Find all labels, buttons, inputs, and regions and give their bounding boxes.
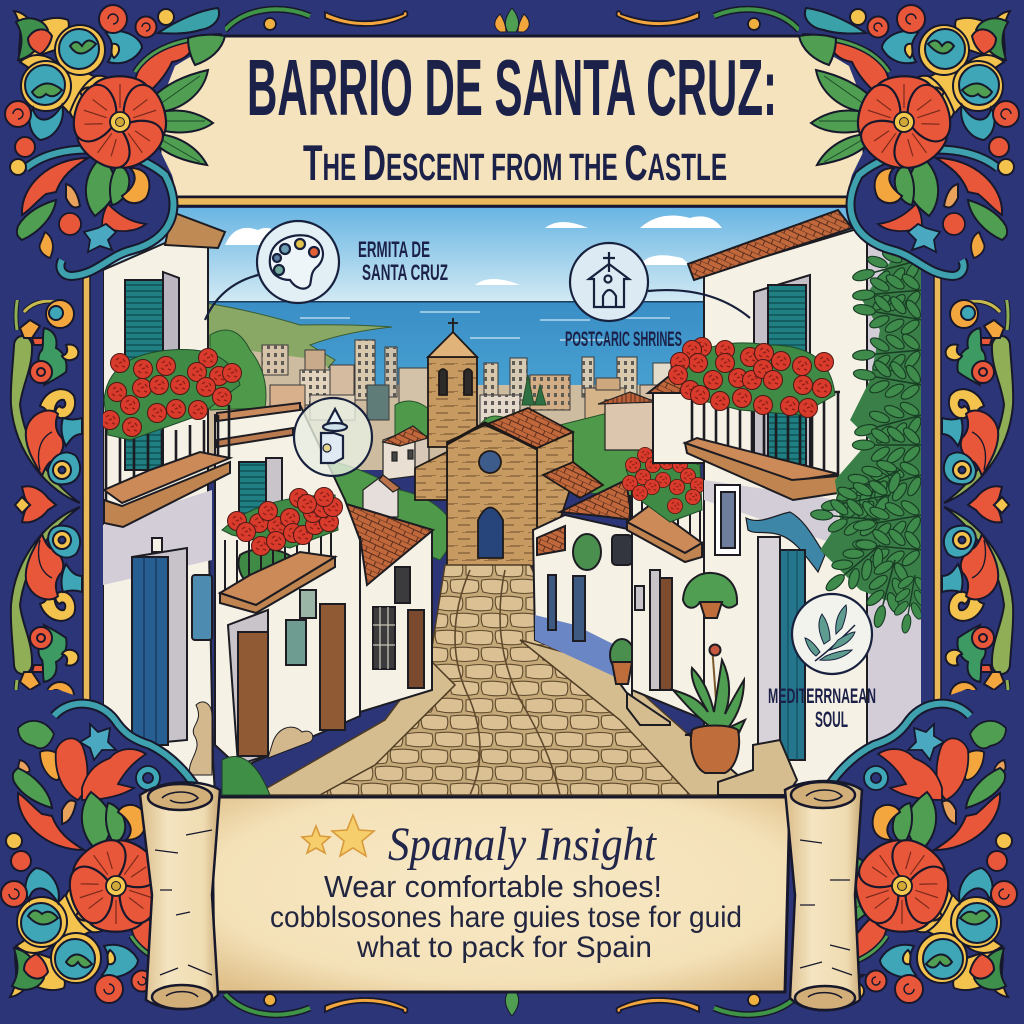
insight heading: Spanaly Insight (388, 818, 657, 871)
church with tower (415, 318, 603, 572)
insight body text: Wear comfortable shoes! (324, 869, 662, 904)
corner: top left floral (5, 5, 225, 240)
label: Ermita de Santa Cruz (358, 237, 448, 285)
right balcony (668, 338, 840, 500)
corner: top right floral (799, 5, 1019, 240)
coastal hill (205, 303, 392, 400)
side chapel roof (543, 462, 603, 498)
label: Postcaric Shrines: POSTCARIC SHRINES (565, 328, 682, 351)
climbing vine (809, 240, 932, 636)
central balcony (220, 488, 342, 613)
trees around the church (210, 330, 660, 560)
label: Mediterrnaean Soul: SOUL (815, 707, 848, 732)
street scene panel (100, 208, 932, 795)
corner: bottom right floral (797, 768, 1017, 1003)
left side border vines (11, 272, 82, 738)
upper left balcony (100, 348, 242, 527)
right side border vines (942, 272, 1013, 738)
house with red roof (333, 500, 433, 712)
insight scroll (140, 781, 862, 1010)
right foreground houses (533, 210, 932, 795)
inner gold frame rails (83, 260, 941, 740)
callout: olive sprig icon (792, 594, 872, 674)
bottom border ornament (225, 992, 799, 1016)
left foreground houses (100, 212, 433, 795)
hanging pot plant (683, 573, 737, 618)
right stone curb (520, 640, 780, 795)
small house behind right balcony (648, 377, 705, 463)
label: Ermita de Santa Cruz: SANTA CRUZ (362, 260, 448, 285)
insight body text (270, 869, 742, 964)
subtitle: THE DESCENT FROM THE CASTLE (303, 135, 727, 191)
left scroll roll (140, 782, 220, 1009)
parchment body (212, 797, 790, 992)
central white house (215, 403, 360, 768)
label: Ermita de Santa Cruz: ERMITA DE (358, 237, 430, 262)
label: Mediterrnaean Soul (768, 685, 876, 732)
callout: palette icon (205, 221, 339, 320)
sea (100, 302, 924, 412)
church facade and nave (415, 408, 573, 572)
cobblestone street (255, 565, 780, 795)
navy frame margins (91, 260, 933, 740)
foreground shrub bottom left (222, 757, 270, 795)
insight body text: what to pack for Spain (356, 931, 652, 964)
arch: top right (799, 0, 1024, 300)
arch: bottom right (819, 690, 1024, 1024)
arch: top left (0, 0, 225, 300)
horizon line (205, 301, 705, 302)
terracotta pot with plant (673, 644, 745, 773)
small blue-trim house (533, 480, 634, 700)
large right house (688, 210, 922, 795)
corner: bottom left floral (1, 768, 221, 1003)
label: Mediterrnaean Soul: MEDITERRNAEAN (768, 685, 876, 708)
small houses (363, 392, 656, 517)
bell tower (428, 318, 477, 447)
skyline (205, 340, 700, 470)
insight body text: cobblsosones hare guies tose for guid (270, 901, 742, 934)
icon: stars (302, 815, 374, 856)
callout: tower lens icon (294, 398, 372, 476)
mid house with balcony (622, 447, 706, 725)
arch: bottom left (0, 690, 205, 1024)
sky and clouds (100, 208, 924, 304)
right scroll roll (785, 781, 862, 1010)
callout: chapel icon (570, 243, 750, 321)
tall white house (103, 212, 225, 795)
top border ornament (225, 8, 799, 32)
title banner (160, 36, 864, 206)
left stone curb (255, 660, 455, 795)
